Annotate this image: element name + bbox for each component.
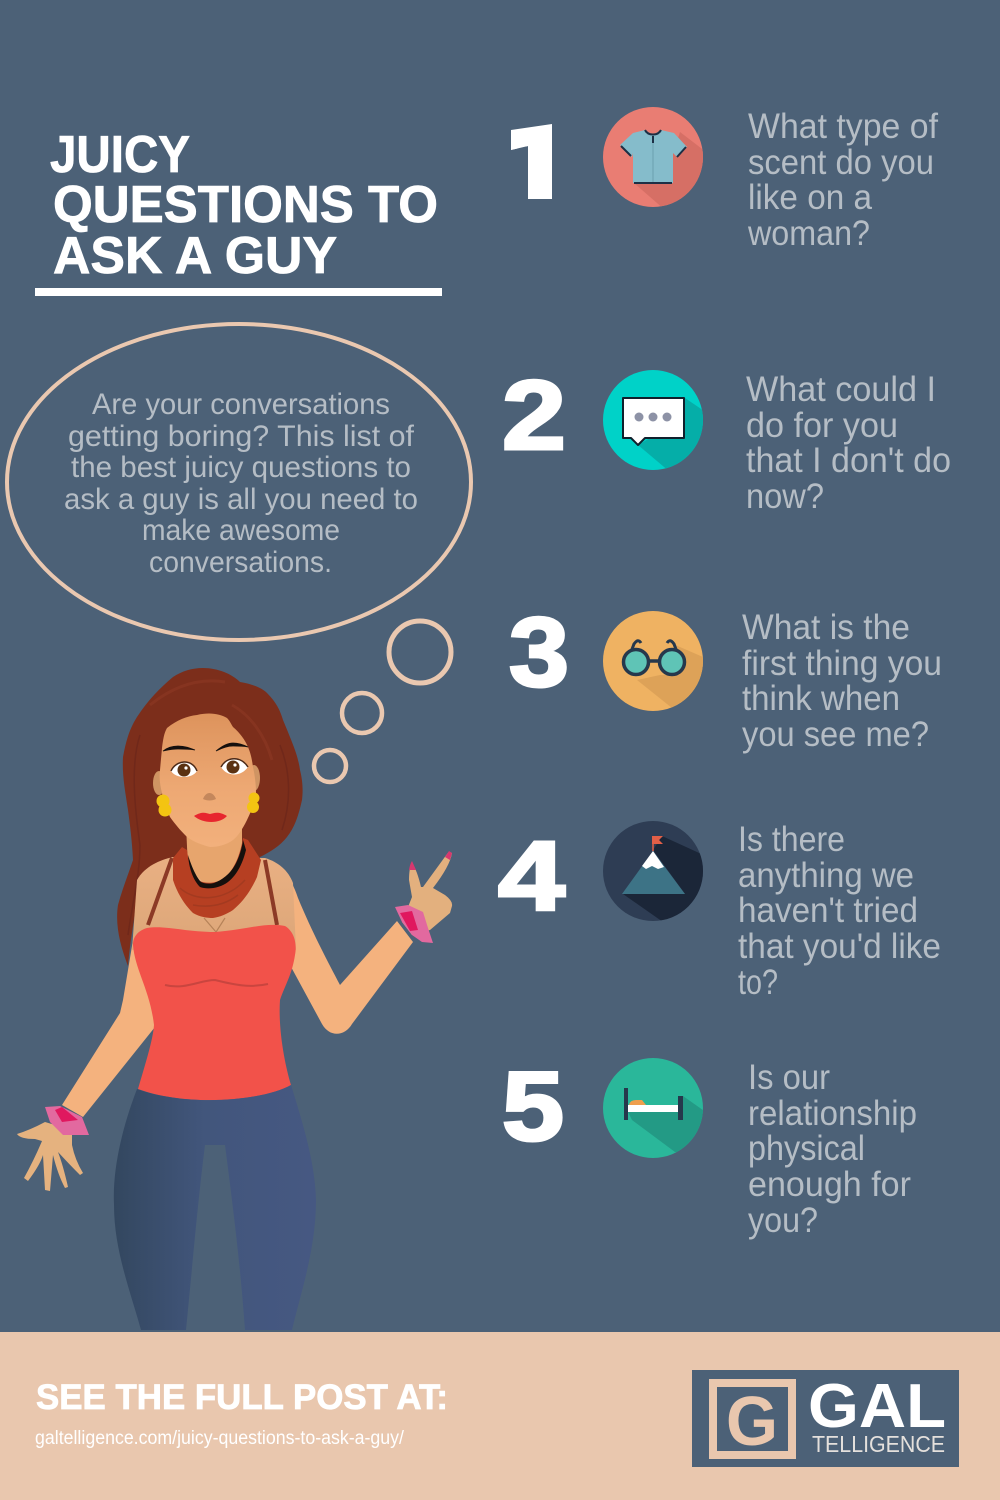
- title: JUICY: [50, 126, 190, 184]
- torso skin: [132, 857, 296, 950]
- hair strands: [128, 735, 289, 935]
- number 2: 2: [502, 360, 566, 470]
- number 3: 3: [509, 597, 569, 707]
- question text: [742, 608, 942, 754]
- number 4: 4: [498, 821, 565, 931]
- intro text: ask a guy is all you need to: [64, 483, 418, 516]
- question 2: [504, 370, 950, 508]
- nose: [203, 793, 216, 800]
- lips: [194, 813, 227, 822]
- logo: [692, 1370, 959, 1467]
- intro text: conversations.: [149, 546, 332, 579]
- intro text: the best juicy questions to: [71, 451, 411, 484]
- question text: you see me?: [742, 715, 929, 754]
- intro text: getting boring? This list of: [68, 420, 415, 453]
- question text: to?: [738, 963, 778, 1002]
- question 5: [502, 1051, 917, 1240]
- eyes: [171, 762, 197, 777]
- question text: now?: [746, 477, 824, 516]
- title: [35, 126, 442, 296]
- icon: shirt: [603, 107, 710, 210]
- question text: you?: [748, 1201, 818, 1240]
- question text: like on a: [748, 178, 872, 217]
- title: QUESTIONS TO: [53, 176, 438, 234]
- straps: [148, 858, 277, 925]
- question text: What is the: [742, 608, 910, 647]
- icon: glasses: [603, 611, 703, 711]
- hair back: [117, 668, 303, 966]
- question text: do for you: [746, 406, 898, 445]
- right arm: [272, 862, 413, 1034]
- question text: think when: [742, 679, 900, 718]
- question text: relationship: [748, 1094, 917, 1133]
- face: [160, 714, 256, 847]
- icon: mountain: [603, 821, 703, 921]
- woman illustration: [17, 668, 452, 1330]
- right scrunchie: [395, 905, 433, 943]
- question text: [748, 1058, 917, 1240]
- logo: G: [726, 1382, 778, 1460]
- question text: first thing you: [742, 644, 942, 683]
- question text: What type of: [748, 107, 938, 146]
- scarf: [173, 838, 261, 918]
- logo: GAL: [808, 1372, 946, 1441]
- ears: [153, 771, 165, 795]
- footer heading: SEE THE FULL POST AT:: [36, 1378, 448, 1417]
- right hand: [395, 851, 452, 943]
- jeans: [114, 1085, 316, 1330]
- icon: bed: [603, 1058, 710, 1158]
- footer url: galtelligence.com/juicy-questions-to-ask-a-guy/: [35, 1428, 405, 1449]
- left arm: [62, 875, 165, 1117]
- left scrunchie: [45, 1106, 89, 1135]
- title: ASK A GUY: [53, 227, 337, 285]
- thought bubble: [7, 324, 471, 782]
- question text: Is our: [748, 1058, 830, 1097]
- earrings: [156, 792, 260, 816]
- question 4: [498, 820, 941, 1002]
- question text: What could I: [746, 370, 936, 409]
- question text: [746, 370, 951, 516]
- top: [133, 925, 296, 1100]
- logo: TELLIGENCE: [812, 1431, 945, 1457]
- number 1: 1: [505, 110, 555, 220]
- left hand: [17, 1106, 89, 1191]
- number 5: 5: [502, 1051, 564, 1161]
- question text: physical: [748, 1129, 865, 1168]
- question text: [747, 107, 938, 253]
- question 3: [509, 597, 942, 754]
- question text: Is there: [738, 820, 845, 859]
- intro text: make awesome: [142, 514, 340, 547]
- question text: scent do you: [748, 143, 934, 182]
- intro text: [64, 388, 418, 579]
- footer band: [0, 1332, 1000, 1500]
- question text: woman?: [747, 214, 870, 253]
- necklace: [204, 918, 225, 945]
- eyebrows: [163, 743, 248, 751]
- neck: [186, 825, 242, 890]
- question text: anything we: [738, 856, 914, 895]
- question text: [738, 820, 941, 1002]
- question text: enough for: [748, 1165, 911, 1204]
- question text: that you'd like: [738, 927, 941, 966]
- icon: speech bubble: [603, 370, 710, 472]
- question text: haven't tried: [738, 891, 918, 930]
- question 1: [505, 107, 938, 253]
- intro text: Are your conversations: [92, 388, 390, 421]
- question text: that I don't do: [746, 441, 951, 480]
